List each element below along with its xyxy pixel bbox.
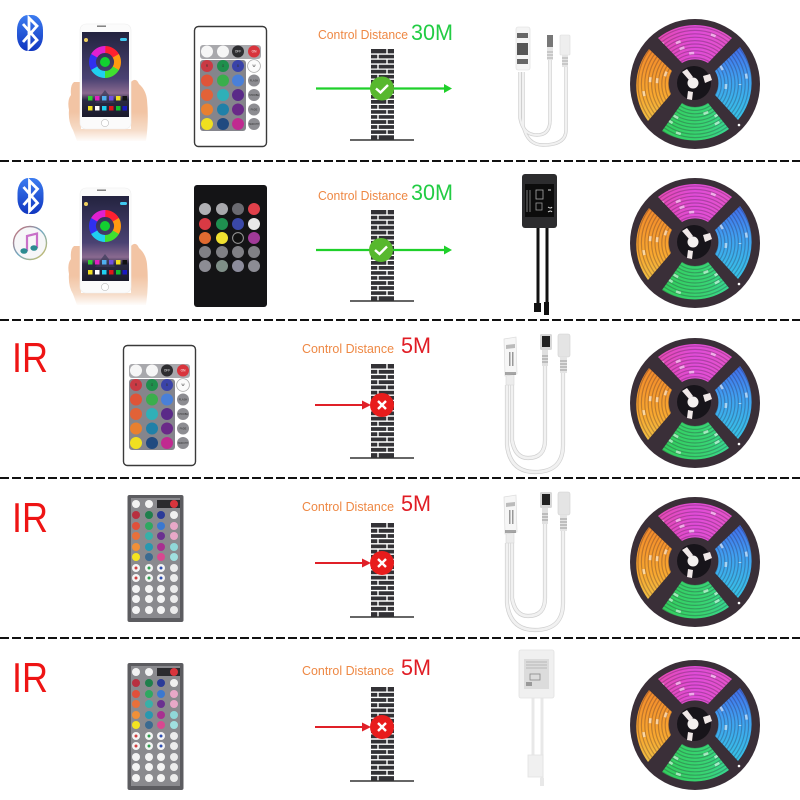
icon: bluetooth: [18, 178, 44, 214]
IR heading: IR: [12, 334, 48, 381]
control distance label: 30M: [411, 20, 453, 45]
LED strip reel: [630, 19, 760, 149]
LED strip reel: [630, 497, 760, 627]
LED strip reel: [630, 338, 760, 468]
brick wall: [350, 523, 414, 617]
row 5: IR 44-key box controller: [12, 650, 760, 790]
arrow passing through wall: [316, 76, 452, 100]
row separator lines: [0, 161, 800, 638]
control distance label: Control Distance: [302, 499, 394, 514]
control distance label: 30M: [411, 180, 453, 205]
row 2: Bluetooth music controller: [14, 174, 760, 315]
smartphone app held in hand: [68, 24, 148, 141]
white 24-key remote: [194, 26, 266, 146]
icon: music: [14, 226, 46, 260]
IR heading: IR: [12, 494, 48, 541]
row 1: Bluetooth controller: [17, 15, 760, 149]
44-key remote: [128, 663, 184, 790]
44-key remote: [128, 495, 184, 622]
white 24-key remote: [124, 346, 196, 466]
black music controller with cables: [522, 174, 557, 315]
control distance label: Control Distance: [302, 341, 394, 356]
LED strip reel: [630, 178, 760, 308]
IR heading: IR: [12, 654, 48, 701]
control distance label: [302, 333, 431, 358]
control distance label: [302, 655, 431, 680]
control distance label: 5M: [401, 655, 431, 680]
control distance label: [302, 491, 431, 516]
smartphone app held in hand: [68, 188, 148, 305]
control distance label: [318, 20, 453, 45]
brick wall: [350, 687, 414, 781]
control distance label: 5M: [401, 491, 431, 516]
white IR controller with cables: [504, 492, 570, 630]
control distance label: Control Distance: [318, 188, 408, 203]
LED strip reel: [630, 660, 760, 790]
brick wall: [350, 210, 414, 301]
white IR controller with cables: [504, 334, 570, 472]
blocked arrow: [315, 715, 394, 739]
control distance label: 5M: [401, 333, 431, 358]
black music remote: [194, 185, 267, 307]
brick wall: [350, 49, 414, 140]
brick wall: [350, 364, 414, 458]
control distance label: [318, 180, 453, 205]
blocked arrow: [315, 551, 394, 575]
row 3: IR 24-key controller: [12, 333, 760, 472]
control distance label: Control Distance: [302, 663, 394, 678]
arrow passing through wall: [316, 238, 452, 262]
control distance label: Control Distance: [318, 27, 408, 42]
blocked arrow: [315, 393, 394, 417]
row 4: IR 44-key controller: [12, 491, 760, 630]
Bluetooth controller with cables: [516, 27, 570, 145]
icon: bluetooth: [17, 15, 43, 51]
white box controller with cables: [519, 650, 554, 786]
